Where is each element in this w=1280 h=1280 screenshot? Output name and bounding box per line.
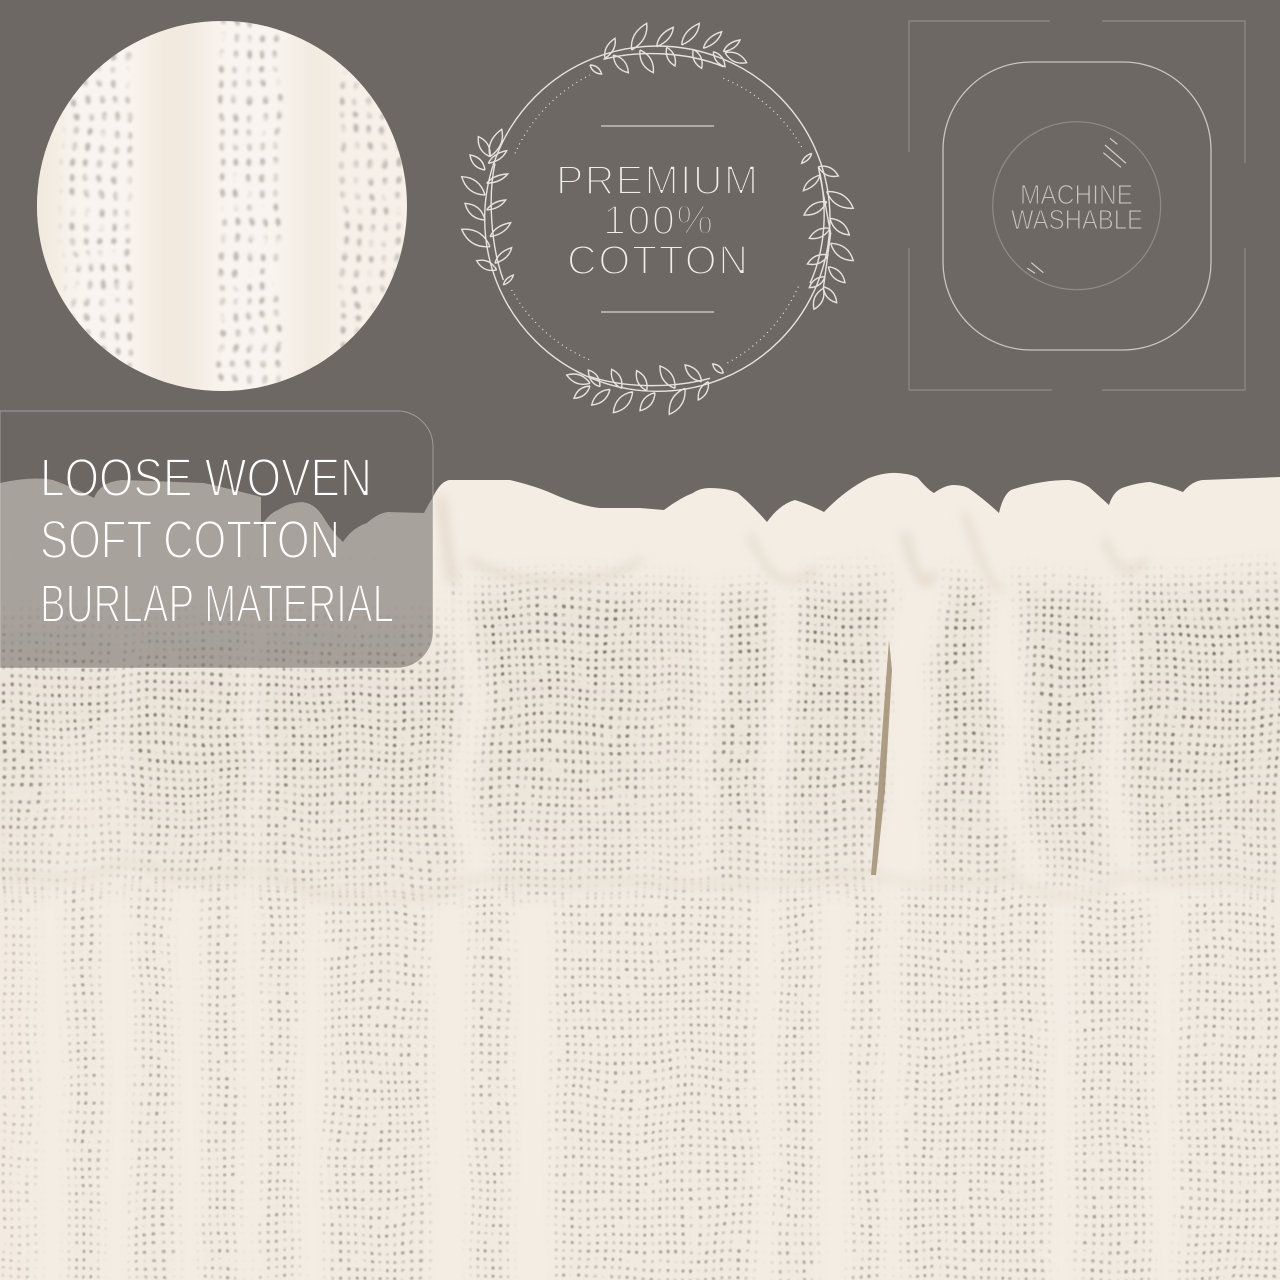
left branch leaves [462, 129, 513, 285]
inner circle [993, 122, 1161, 290]
premium cotton text: 100% [603, 197, 713, 243]
machine washable text: WASHABLE [1011, 204, 1143, 235]
background and curtain photo with translucent callout panel [0, 410, 1280, 1280]
premium cotton text: PREMIUM [556, 157, 758, 203]
wreath rules [601, 126, 714, 312]
curtain fabric [0, 460, 1280, 1280]
machine washable text: MACHINE [1020, 179, 1133, 210]
machine washable badge [909, 21, 1245, 390]
premium cotton text: COTTON [567, 237, 748, 283]
bottom branch leaves [567, 364, 723, 414]
right branch leaves [802, 153, 853, 309]
machine washable text [1011, 179, 1143, 235]
corner frame [909, 21, 1245, 390]
callout text [40, 448, 394, 634]
fabric swatch circle [30, 10, 408, 402]
rounded square [943, 62, 1211, 350]
gleam ticks [1027, 138, 1126, 273]
cotton wreath badge [462, 23, 853, 414]
fold slit [871, 640, 892, 875]
callout panel [0, 411, 433, 668]
callout text: SOFT COTTON [40, 510, 340, 570]
callout text: BURLAP MATERIAL [40, 574, 394, 634]
premium cotton text [556, 157, 758, 283]
callout text: LOOSE WOVEN [40, 448, 372, 508]
wreath [462, 23, 853, 414]
top branch leaves [590, 23, 747, 74]
